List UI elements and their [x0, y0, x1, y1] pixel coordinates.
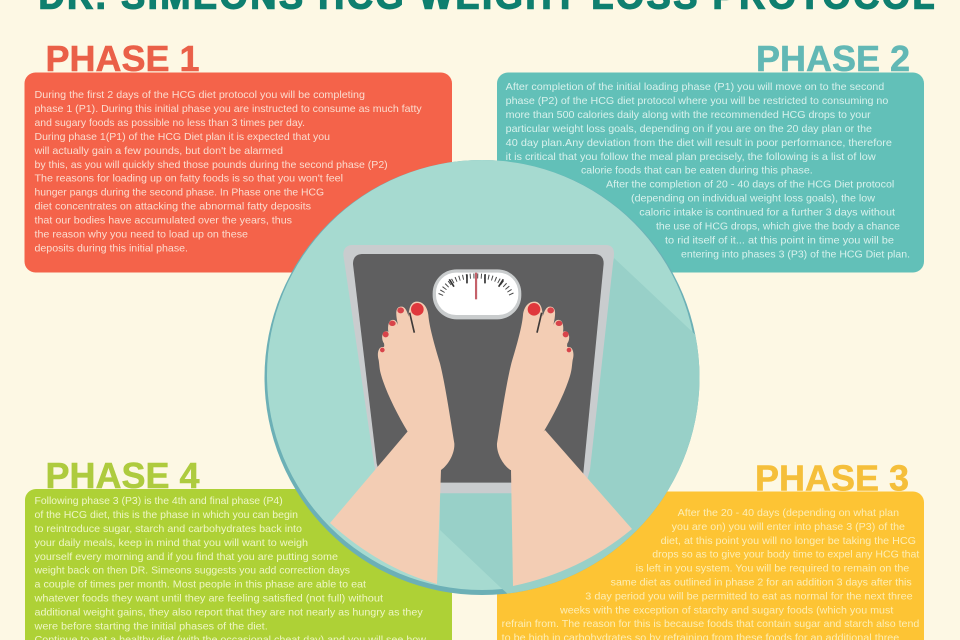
heading: phase 4: PHASE 4 [46, 455, 200, 496]
body text: phase 1: During phase 1(P1) of the HCG Diet plan it is expected that you [34, 132, 330, 143]
body text: phase 4 [33, 496, 426, 640]
panel: phase 3 [497, 492, 924, 640]
dial [433, 269, 521, 319]
body text: phase 2: calorie foods that can be eaten during this phase. [581, 166, 813, 177]
body text: phase 4: to reintroduce sugar, starch and carbohydrates back into [34, 524, 302, 535]
scale body [343, 245, 614, 493]
body text: phase 4: Following phase 3 (P3) is the 4th and final phase (P4) [34, 496, 283, 507]
left leg [330, 431, 441, 584]
body text: phase 4: of the HCG diet, this is the phase in which you can begin [34, 510, 298, 521]
body text: phase 4: additional weight gains, they also report that they are not nearly as hungry as they [34, 607, 424, 618]
body text: phase 4: yourself every morning and if you find that you are putting some [34, 552, 338, 563]
body text: phase 2: the use of HCG drops, which give the body a chance [656, 222, 900, 232]
body text: phase 3: drops so as to give your body time to expel any HCG that [652, 550, 919, 561]
body text: phase 1: phase 1 (P1). During this initial phase you are instructed to consume as much fatty [34, 104, 423, 115]
body text: phase 3 [502, 508, 920, 640]
body text: phase 3: 3 day period you will be permitted to eat as normal for the next three [585, 591, 913, 602]
body text: phase 3: weeks with the exception of starchy and sugary foods (which you must [559, 605, 893, 616]
body text: phase 2: phase (P2) of the HCG diet protocol where you will be restricted to consuming no [506, 96, 889, 107]
long shadow of scale [440, 258, 700, 594]
body text: phase 4: whatever foods they want until they are feeling satisfied (not full) without [33, 594, 383, 604]
heading: phase 1: PHASE 1 [46, 38, 200, 79]
body text: phase 1: During the first 2 days of the HCG diet protocol you will be completing [34, 90, 365, 101]
circle rim [264, 160, 700, 595]
body text: phase 3: After the 20 - 40 days (depending on what plan [678, 508, 899, 519]
body text: phase 1: diet concentrates on attacking the abnormal fatty deposits [34, 202, 311, 213]
body text: phase 1: will actually gain a few pounds, but don't be alarmed [33, 146, 283, 157]
body text: phase 2: (depending on individual weight loss goals), the low [631, 194, 876, 205]
heading: phase 3: PHASE 3 [755, 458, 909, 498]
body text: phase 3: you are on) you will enter into phase 3 (P3) of the [672, 522, 905, 533]
body text: phase 2: to rid itself of it... at this point in time you will be [665, 236, 894, 246]
illustration: feet on bathroom scale in circle [264, 160, 700, 595]
body text: phase 3: same diet as outlined in phase 2 for an addition 3 days after this [611, 578, 912, 588]
heading: phase 2: PHASE 2 [756, 38, 910, 79]
body text: phase 2: 40 day plan.Any deviation from the diet will result in poor performance, therefore [506, 138, 892, 149]
right leg [511, 430, 632, 586]
body text: phase 4: a couple of times per month. Most people in this phase are able to eat [34, 580, 366, 591]
body text: phase 4: were before starting the initial phases of the diet. [33, 621, 268, 632]
scale plate [353, 254, 604, 483]
panel: phase 2 [497, 72, 924, 272]
body text: phase 1: that our bodies have accumulated over the years, thus [34, 216, 292, 227]
body text: phase 2: caloric intake is continued for a further 3 days without [639, 208, 895, 219]
body text: phase 2: After the completion of 20 - 40 days of the HCG Diet protocol [606, 180, 894, 191]
panel: phase 1 [24, 72, 452, 272]
right foot [497, 302, 573, 470]
body text: phase 1 [33, 90, 423, 254]
panel: phase 4 [25, 489, 452, 640]
body text: phase 2: it is critical that you follow the meal plan precisely, the following is a list of low [506, 152, 876, 163]
circle background [267, 160, 697, 590]
body text: phase 3: diet, at this point you will no longer be taking the HCG [661, 536, 916, 547]
body text: phase 1: by this, as you will quickly shed those pounds during the second phase (P2) [34, 160, 388, 171]
left foot [378, 302, 454, 470]
body text: phase 1: hunger pangs during the second phase. In Phase one the HCG [34, 188, 324, 199]
body text: phase 3: refrain from. The reason for this is because foods that contain sugar and starch also tend [502, 619, 920, 630]
body text: phase 2: entering into phases 3 (P3) of the HCG Diet plan. [681, 249, 910, 260]
body text: phase 4: your daily meals, keep in mind that you will want to weigh [34, 538, 308, 549]
body text: phase 2: particular weight loss goals, depending on if you are on the 20 day plan or the [506, 124, 872, 135]
body text: phase 3: is left in you system. You will be required to remain on the [636, 564, 910, 575]
body text: phase 1: deposits during this initial phase. [34, 244, 188, 254]
body text: phase 4: weight back on then DR. Simeons suggests you add correction days [33, 566, 350, 577]
body text: phase 1: the reason why you need to load up on these [34, 230, 248, 240]
body text: phase 1: and sugary foods as possible no less than 3 times per day. [34, 118, 305, 129]
body text: phase 2: more than 500 calories daily along with the recommended HCG drops to your [506, 110, 871, 121]
body text: phase 2 [506, 82, 910, 260]
body text: phase 2: After completion of the initial loading phase (P1) you will move on to the second [506, 82, 885, 93]
body text: phase 1: The reasons for loading up on fatty foods is so that you won't feel [34, 174, 343, 185]
